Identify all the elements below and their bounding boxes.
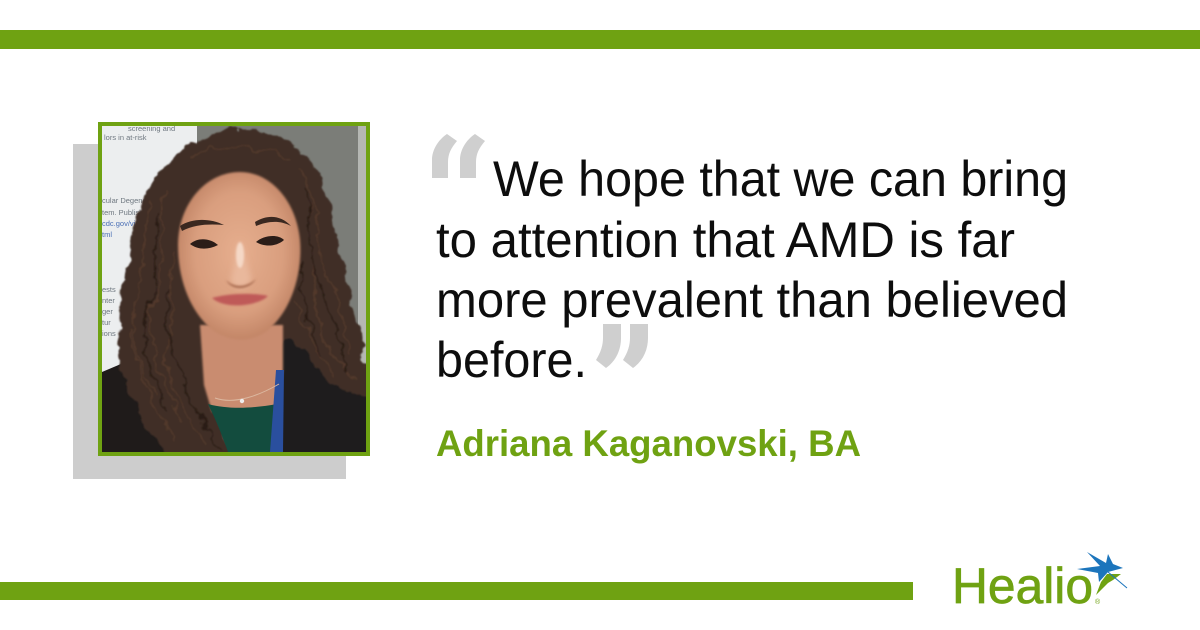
- portrait photo with green frame: cular Degenera: [102, 196, 154, 205]
- portrait photo with green frame: [100, 124, 368, 456]
- attribution name: Adriana Kaganovski, BA: [436, 423, 861, 464]
- portrait photo with green frame: ger: [102, 307, 113, 316]
- portrait photo with green frame: tur: [102, 318, 111, 327]
- Healio logo: Healio: [952, 558, 1093, 614]
- quote text: [436, 151, 1068, 388]
- Healio logo: ®: [1095, 598, 1101, 606]
- bottom green bar: [0, 582, 913, 600]
- portrait photo with green frame: tem. Published: [102, 208, 152, 217]
- closing quotation mark: [596, 324, 648, 368]
- portrait photo with green frame: screening and: [128, 124, 175, 133]
- portrait photo with green frame: cdc.gov/visio: [102, 219, 145, 228]
- quote text: to attention that AMD is far: [436, 212, 1015, 268]
- portrait photo with green frame: lors in at-risk: [104, 133, 147, 142]
- quote text: We hope that we can bring: [493, 151, 1068, 207]
- opening quotation mark: [432, 134, 485, 178]
- quote text: more prevalent than believed: [436, 272, 1068, 328]
- portrait photo with green frame: tml: [102, 230, 112, 239]
- portrait photo with green frame: ions: [102, 329, 116, 338]
- portrait photo with green frame: nter: [102, 296, 115, 305]
- quote text: before.: [436, 332, 587, 388]
- top green bar: [0, 30, 1200, 49]
- photo shadow panel: [73, 144, 346, 479]
- portrait photo with green frame: ests: [102, 285, 116, 294]
